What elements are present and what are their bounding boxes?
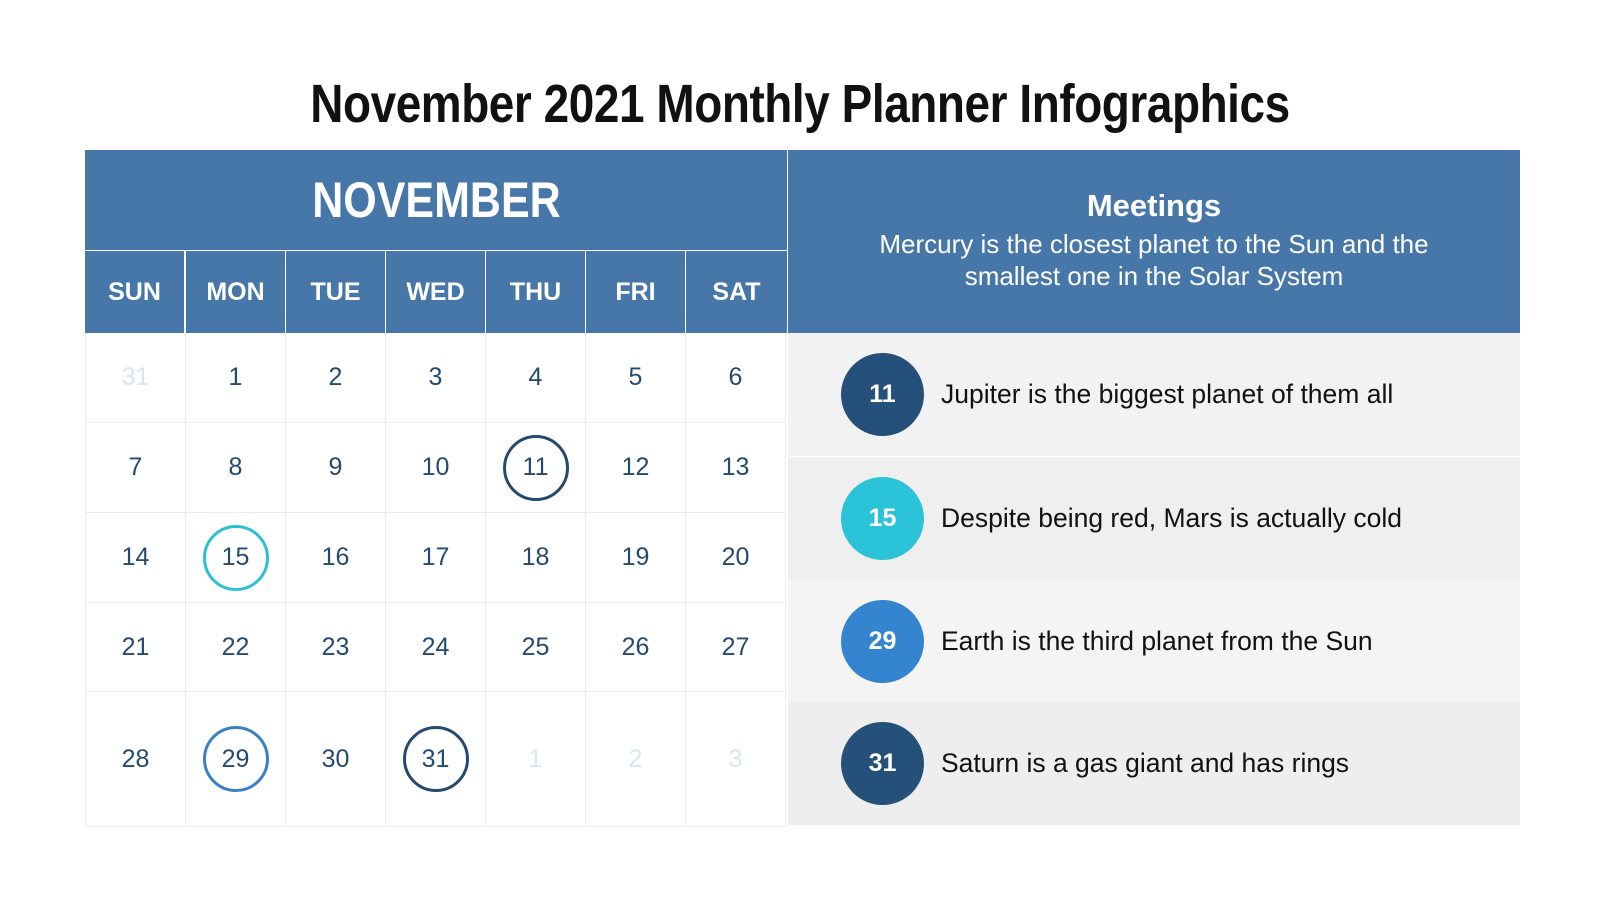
weekday header row: SAT bbox=[712, 278, 761, 306]
meeting item 15: 15 bbox=[869, 504, 896, 532]
date grid: 31 bbox=[422, 744, 449, 772]
date grid: 2 bbox=[629, 744, 642, 772]
weekday header row bbox=[85, 251, 787, 333]
date grid: 27 bbox=[722, 632, 749, 660]
date grid: 3 bbox=[429, 363, 442, 391]
date grid: 13 bbox=[722, 453, 749, 481]
date grid: 28 bbox=[122, 744, 149, 772]
date grid: 14 bbox=[122, 543, 149, 571]
meeting item 31: 31 bbox=[869, 749, 896, 777]
date grid: 24 bbox=[422, 632, 449, 660]
meeting item 11: 11 bbox=[869, 380, 896, 408]
date grid: 30 bbox=[322, 744, 349, 772]
date grid: 12 bbox=[622, 453, 649, 481]
meeting item 15: Despite being red, Mars is actually cold bbox=[941, 503, 1402, 533]
weekday header row: TUE bbox=[310, 278, 360, 306]
date grid: 2 bbox=[329, 363, 342, 391]
meeting item 29 bbox=[788, 580, 1520, 703]
meeting item 15 bbox=[788, 457, 1520, 580]
meeting item 31 bbox=[788, 702, 1520, 825]
title: November 2021 Monthly Planner Infographics bbox=[310, 74, 1290, 134]
date grid: 22 bbox=[222, 632, 249, 660]
meetings header: smallest one in the Solar System bbox=[965, 261, 1343, 291]
meetings header bbox=[788, 150, 1520, 333]
meeting item 29: Earth is the third planet from the Sun bbox=[941, 626, 1373, 656]
date grid: 4 bbox=[529, 363, 542, 391]
panel: meetings bbox=[788, 150, 1520, 825]
date grid: 6 bbox=[729, 363, 742, 391]
date grid: 10 bbox=[422, 453, 449, 481]
date grid: 23 bbox=[322, 632, 349, 660]
weekday header row: SUN bbox=[108, 278, 161, 306]
weekday header row: FRI bbox=[615, 278, 656, 306]
date grid: 20 bbox=[722, 543, 749, 571]
meetings header: Meetings bbox=[1087, 188, 1221, 223]
date grid: 1 bbox=[229, 363, 242, 391]
month header: NOVEMBER bbox=[312, 172, 560, 228]
month header bbox=[85, 150, 787, 250]
date grid: 16 bbox=[322, 543, 349, 571]
date grid: 25 bbox=[522, 632, 549, 660]
date grid: 3 bbox=[729, 744, 742, 772]
date grid: 15 bbox=[222, 543, 249, 571]
date grid: 7 bbox=[129, 453, 142, 481]
meeting item 11: Jupiter is the biggest planet of them all bbox=[941, 379, 1393, 409]
date grid: 18 bbox=[522, 543, 549, 571]
meeting item 31: Saturn is a gas giant and has rings bbox=[941, 748, 1349, 778]
meeting item 29: 29 bbox=[869, 627, 896, 655]
meetings header: Mercury is the closest planet to the Sun and the bbox=[879, 229, 1429, 259]
date grid: 1 bbox=[529, 744, 542, 772]
date grid: 17 bbox=[422, 543, 449, 571]
date grid bbox=[85, 333, 787, 827]
date grid: 31 bbox=[122, 363, 149, 391]
date grid: 8 bbox=[229, 453, 242, 481]
weekday header row: WED bbox=[406, 278, 465, 306]
date grid: 21 bbox=[122, 632, 149, 660]
meeting item 11 bbox=[788, 333, 1520, 456]
date grid: 29 bbox=[222, 744, 249, 772]
weekday header row: THU bbox=[510, 278, 561, 306]
date grid: 11 bbox=[523, 453, 548, 481]
date grid: 5 bbox=[629, 363, 642, 391]
panel: calendar bbox=[85, 150, 787, 827]
weekday header row: MON bbox=[206, 278, 265, 306]
date grid: 26 bbox=[622, 632, 649, 660]
date grid: 19 bbox=[622, 543, 649, 571]
date grid: 9 bbox=[329, 453, 342, 481]
